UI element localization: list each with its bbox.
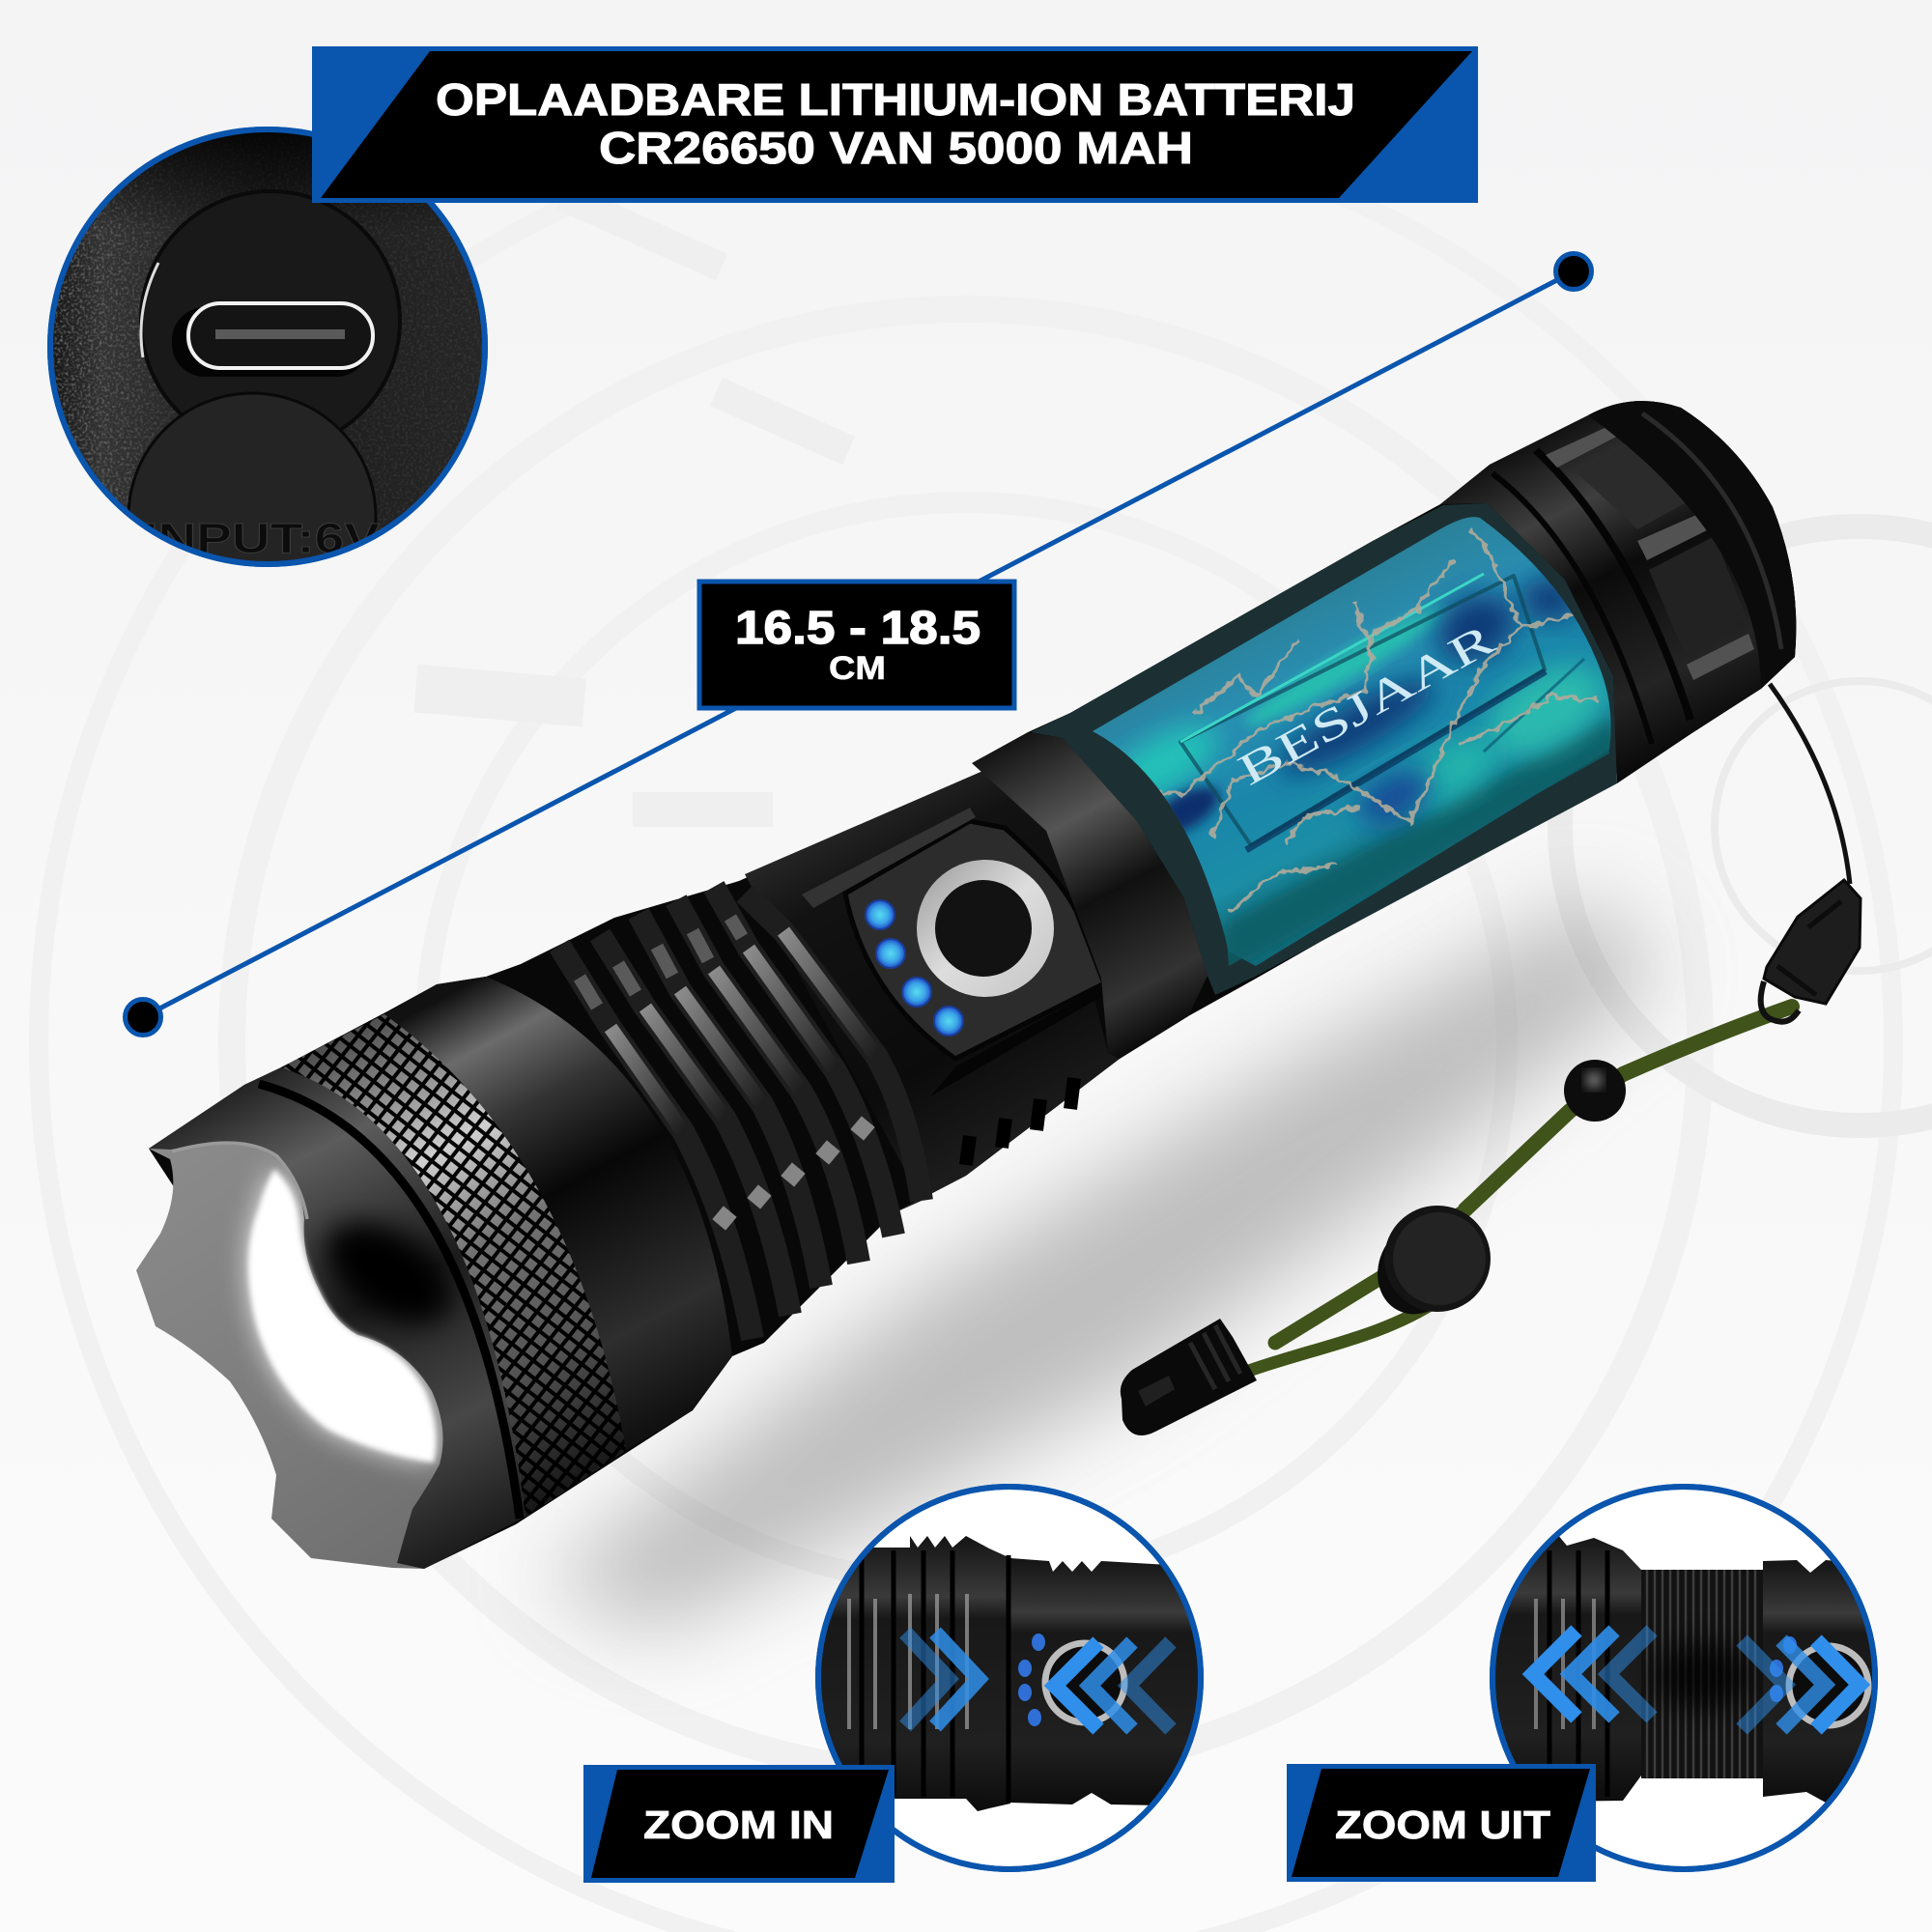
rubber cover flap — [128, 392, 377, 559]
head bezel — [149, 1067, 526, 1569]
window teal fill — [1093, 517, 1611, 966]
USB-C socket — [172, 303, 373, 377]
zoom in body right — [1010, 1558, 1208, 1806]
head crown — [136, 1085, 483, 1569]
rib lower lugs — [712, 1116, 875, 1231]
flashlight — [136, 401, 1796, 1569]
flashlight shadow — [541, 898, 1662, 1633]
zoom out body left — [1488, 1534, 1641, 1803]
title banner — [312, 46, 1478, 203]
lanyard end clip — [1121, 1319, 1257, 1435]
embossed input text: INPUT:6V — [143, 515, 381, 562]
window glass frame — [1031, 503, 1617, 995]
lanyard — [1121, 684, 1861, 1435]
lanyard stopper — [1361, 1206, 1491, 1329]
zoom out button ring — [1789, 1646, 1868, 1725]
rib bright bars — [611, 931, 876, 1131]
grip section — [745, 732, 1120, 1213]
battery brand text: BESJAAR — [1230, 613, 1502, 795]
zoom in body left — [811, 1536, 1010, 1811]
window lower band overlay — [1219, 720, 1623, 976]
bezel dark reflection — [308, 1202, 469, 1345]
power button — [917, 860, 1054, 997]
zoom in label — [583, 1765, 895, 1883]
lanyard bead — [1564, 1060, 1626, 1122]
rib dark bands — [559, 887, 922, 1339]
zoom out chevrons — [1533, 1631, 1860, 1729]
tail grip blocks — [1575, 442, 1747, 657]
tail cap — [1440, 401, 1796, 783]
LED indicators — [866, 900, 963, 1036]
zoom out body right — [1763, 1560, 1884, 1803]
window colour patches — [1099, 578, 1618, 846]
title line 1: OPLAADBARE LITHIUM-ION BATTERIJ — [436, 74, 1355, 125]
zoom in chevrons — [905, 1633, 1171, 1729]
zoom uit label: ZOOM UIT — [1335, 1803, 1550, 1847]
head ring band — [384, 977, 732, 1450]
lanyard green cord — [1246, 1007, 1792, 1372]
port housing background — [53, 135, 482, 531]
lens — [248, 1169, 436, 1463]
vent slots — [966, 1078, 1074, 1165]
rib upper lugs — [580, 918, 742, 1007]
window lower dark teal band — [1225, 705, 1609, 966]
dimension line with end dots — [126, 253, 1592, 1036]
battery cell outlines — [1180, 574, 1584, 850]
zoom in detail circle — [811, 1487, 1208, 1869]
zoom in label: ZOOM IN — [643, 1803, 834, 1847]
zoom out detail circle — [1488, 1487, 1884, 1869]
switch panel — [802, 808, 1107, 1096]
crown rim highlight — [172, 1143, 307, 1219]
knurled grip — [281, 1014, 626, 1517]
zoom out threaded middle — [1641, 1570, 1765, 1778]
length label: 16.5 - 18.5 — [735, 603, 980, 654]
length label — [699, 582, 1014, 708]
USB-C port detail circle — [47, 127, 488, 567]
zoom in LEDs — [1018, 1634, 1045, 1726]
zoom in rib lines — [849, 1594, 967, 1729]
zoom out rib lines — [1536, 1599, 1594, 1729]
lightning bolts — [1139, 529, 1601, 911]
lens glow — [248, 1169, 436, 1463]
bezel rim line — [259, 1084, 520, 1519]
lanyard thin loop — [1770, 684, 1850, 884]
zoom in button ring — [1045, 1643, 1124, 1722]
zoom out LEDs — [1770, 1636, 1797, 1702]
collar ring before battery — [972, 732, 1208, 1059]
battery window — [1031, 483, 1642, 995]
zoom uit label — [1287, 1764, 1596, 1882]
ribbed barrel — [559, 887, 922, 1339]
port recess disc — [141, 191, 400, 450]
length label: CM — [829, 650, 886, 687]
lanyard clasp — [1761, 880, 1861, 1022]
title line 2: CR26650 VAN 5000 MAH — [599, 123, 1193, 173]
tail highlight tabs — [1546, 424, 1754, 680]
flashlight base silhouette — [149, 401, 1796, 1569]
tail end face — [1588, 401, 1796, 689]
